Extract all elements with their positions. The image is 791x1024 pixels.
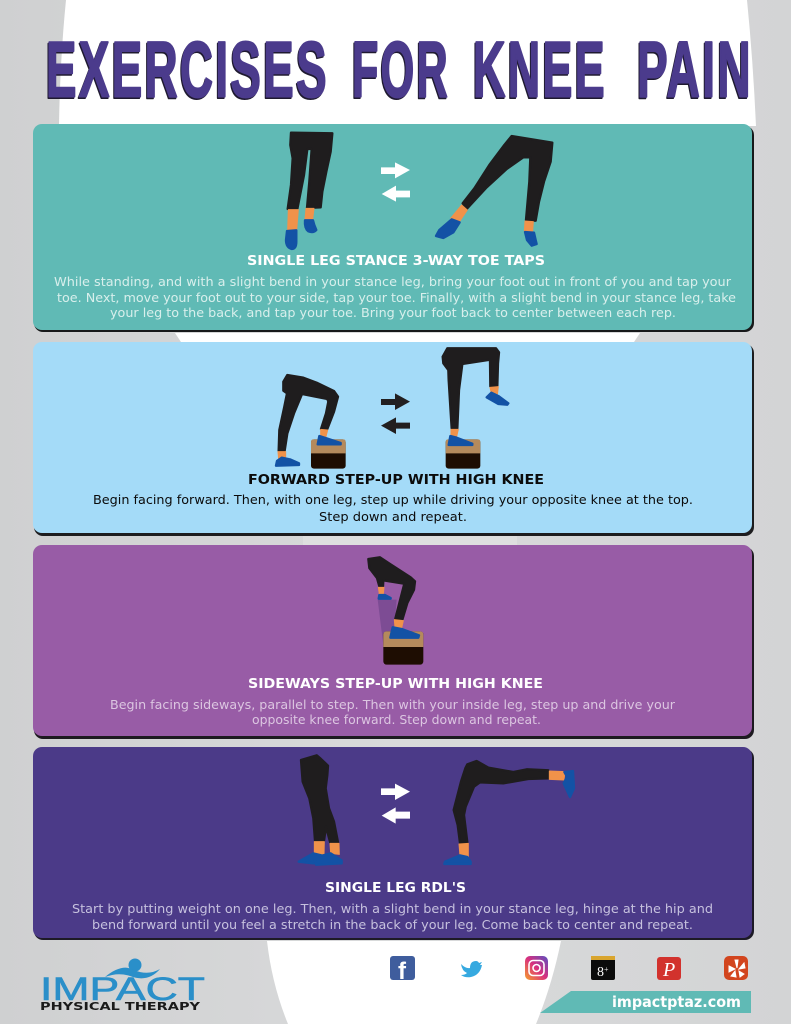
website banner: impactptaz.com xyxy=(612,993,741,1011)
icon: pinterest xyxy=(657,957,681,981)
description: Begin facing sideways, parallel to step. Then with your inside leg, step up and drive your xyxy=(110,697,676,712)
icon: twitter xyxy=(461,961,482,977)
title: EXERCISES xyxy=(45,26,328,115)
title: KNEE xyxy=(472,26,606,115)
icon: google plus xyxy=(591,956,615,980)
description xyxy=(110,697,676,727)
description: Begin facing forward. Then, with one leg, step up while driving your opposite knee at the top. xyxy=(93,492,693,507)
description: opposite knee forward. Step down and repeat. xyxy=(252,712,541,727)
title: FOR xyxy=(352,24,450,114)
logo: Impact Physical Therapy xyxy=(40,958,205,1013)
heading: SINGLE LEG RDL'S xyxy=(325,881,466,896)
icon: pinterest: P xyxy=(662,959,675,981)
illustration: forward step-up xyxy=(276,348,508,469)
description xyxy=(72,901,713,932)
description: Step down and repeat. xyxy=(319,509,467,524)
icon: facebook: f xyxy=(398,958,407,985)
icon: yelp xyxy=(724,956,748,980)
heading: SIDEWAYS STEP-UP WITH HIGH KNEE xyxy=(248,677,543,692)
title: KNEE xyxy=(473,24,607,114)
panel: single leg RDL's xyxy=(33,747,754,940)
description: toe. Next, move your foot out to your side, tap your toe. Finally, with a slight bend in your stance leg, take xyxy=(57,290,736,305)
panel: forward step-up with high knee xyxy=(33,342,754,536)
website banner xyxy=(540,991,751,1013)
illustration: single leg RDL xyxy=(299,755,574,865)
icon: google plus: + xyxy=(604,965,609,974)
description: bend forward until you feel a stretch in the back of your leg. Come back to center and repeat. xyxy=(92,917,693,932)
illustration: sideways step-up xyxy=(368,557,423,665)
title xyxy=(45,24,753,115)
description: your leg to the back, and tap your toe. Bring your foot back to center between each rep. xyxy=(110,305,676,320)
description xyxy=(54,274,736,320)
panel: single leg stance 3-way toe taps xyxy=(33,124,754,332)
heading: FORWARD STEP-UP WITH HIGH KNEE xyxy=(248,473,544,488)
icon: swoosh figure xyxy=(105,958,160,978)
icon: facebook xyxy=(390,956,415,985)
title: EXERCISES xyxy=(46,24,329,114)
logo: Impact Physical Therapy: PHYSICAL THERAPY xyxy=(40,1000,201,1013)
panel: sideways step-up with high knee xyxy=(33,545,754,739)
icon: google plus: 8 xyxy=(597,965,604,980)
description xyxy=(93,492,693,524)
icon: instagram xyxy=(525,956,548,980)
title: FOR xyxy=(351,26,449,115)
heading: SINGLE LEG STANCE 3-WAY TOE TAPS xyxy=(247,254,545,269)
illustration: toe taps xyxy=(286,133,552,249)
logo: Impact Physical Therapy: IMPACT xyxy=(40,971,205,1007)
description: Start by putting weight on one leg. Then, with a slight bend in your stance leg, hinge at the hip and xyxy=(72,901,713,916)
description: While standing, and with a slight bend in your stance leg, bring your foot out in front of you and tap your xyxy=(54,274,732,289)
